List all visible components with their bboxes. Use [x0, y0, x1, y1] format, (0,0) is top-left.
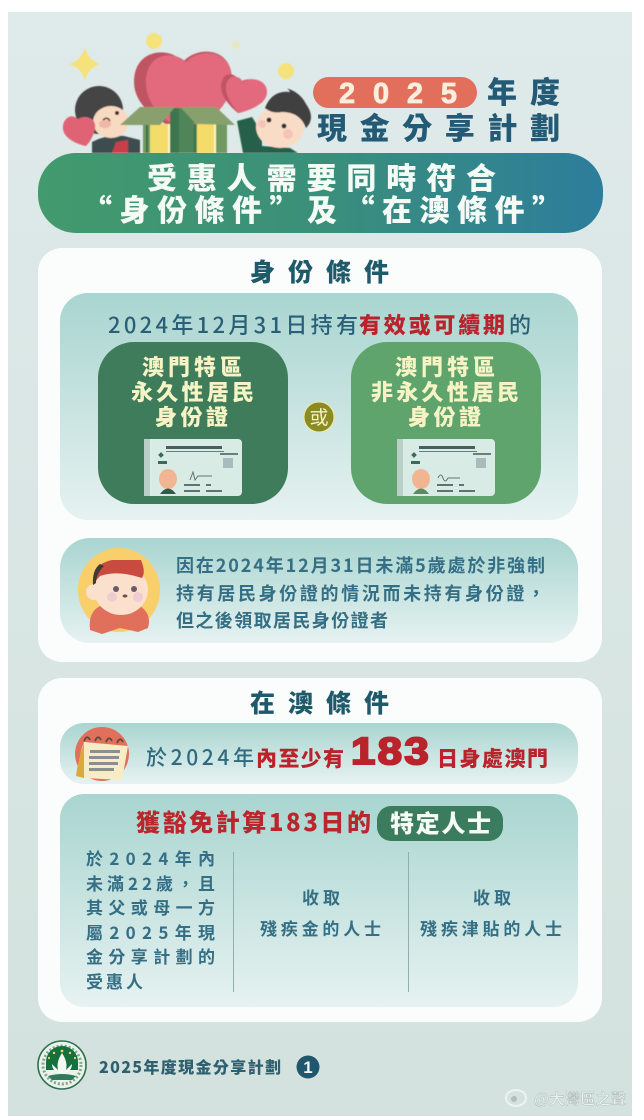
banner line 2: “身份條件”及“在澳條件”	[82, 186, 562, 230]
card: non-permanent resident ID: 非永久性居民	[371, 375, 519, 407]
banner: recipients must meet both conditions	[38, 153, 603, 233]
statement line: 的	[509, 308, 531, 340]
note text: 因在2024年12月31日未滿5歲處於非強制	[176, 552, 545, 578]
banner line 1: 受惠人需要同時符合	[147, 154, 496, 198]
footer	[38, 1041, 320, 1089]
requirement text	[146, 731, 548, 773]
year pill	[313, 77, 477, 110]
requirement text: 日身處澳門	[437, 743, 548, 773]
card: permanent resident ID: 永久性居民	[131, 375, 254, 407]
page number badge: 1	[303, 1058, 313, 1077]
icon: ID card	[144, 439, 242, 496]
card: permanent resident ID: 身份證	[155, 400, 228, 432]
watermark: @大灣區之聲	[534, 1088, 626, 1109]
requirement text: 於2024年	[146, 742, 254, 772]
icon: sparkle stars	[69, 33, 294, 81]
column 3 text: 殘疾津貼的人士	[420, 915, 562, 940]
icon: gift box	[120, 107, 235, 153]
heading: identity conditions: 身份條件	[250, 253, 389, 289]
sub-panel: exempt persons	[60, 794, 578, 1007]
column 1 text: 屬2025年現	[86, 919, 215, 944]
statement line	[108, 308, 531, 340]
page number badge	[296, 1056, 320, 1078]
column 2 text: 殘疾金的人士	[260, 915, 381, 940]
icon: right person	[237, 88, 311, 153]
icon: ID card	[397, 439, 495, 496]
column 1 text: 受惠人	[86, 968, 143, 993]
header illustration: people, hearts and gift box	[63, 33, 311, 153]
requirement text: 183	[351, 731, 431, 773]
column 3 text: 收取	[473, 884, 511, 909]
column 1 text: 於2024年內	[86, 845, 215, 870]
note text: 持有居民身份證的情況而未持有身份證，	[176, 580, 545, 606]
card: permanent resident ID: 澳門特區	[142, 350, 242, 382]
sub-panel: ID card types	[60, 293, 578, 520]
pill: specific persons: 特定人士	[390, 804, 491, 839]
icon: big heart	[134, 52, 232, 132]
year pill: 2025	[339, 78, 457, 110]
panel: residence conditions	[38, 678, 602, 1022]
column 3 text	[420, 884, 562, 940]
sub-panel: children under 5	[60, 538, 578, 643]
column 1 text: 其父或母一方	[86, 894, 215, 919]
icon: child avatar	[78, 548, 160, 634]
column 2 text	[260, 884, 381, 940]
card: non-permanent resident ID: 身份證	[408, 400, 481, 432]
title: 2025 annual cash sharing scheme	[313, 68, 560, 148]
title line 1: 年度	[487, 68, 560, 112]
icon: Macao emblem	[38, 1041, 86, 1089]
column 1 text	[86, 845, 215, 993]
requirement text: 內至少有	[256, 743, 344, 773]
column 1 text: 金分享計劃的	[86, 943, 215, 968]
card: non-permanent resident ID	[351, 342, 541, 504]
title line 2: 現金分享計劃	[317, 104, 560, 148]
panel: identity conditions	[38, 248, 602, 662]
scheme name: 2025年度現金分享計劃	[99, 1054, 281, 1078]
card: permanent resident ID	[98, 342, 288, 504]
note text: 但之後領取居民身份證者	[176, 607, 388, 633]
statement line: 2024年12月31日持有	[108, 308, 358, 340]
statement line: 有效或可續期	[359, 308, 505, 340]
note text	[176, 552, 545, 633]
card: non-permanent resident ID: 澳門特區	[395, 350, 495, 382]
bar: 183 days requirement	[60, 723, 578, 784]
column 1 text: 未滿22歲，且	[86, 870, 215, 895]
icon: left person	[75, 86, 140, 153]
icon: calendar	[75, 727, 129, 781]
icon: small right heart	[221, 74, 267, 113]
or badge	[304, 402, 334, 432]
column 2 text: 收取	[302, 884, 340, 909]
or badge: 或	[309, 403, 329, 430]
heading: residence conditions: 在澳條件	[250, 684, 389, 720]
exempt heading: 獲豁免計算183日的	[136, 803, 371, 838]
icon: left heart	[63, 116, 95, 146]
